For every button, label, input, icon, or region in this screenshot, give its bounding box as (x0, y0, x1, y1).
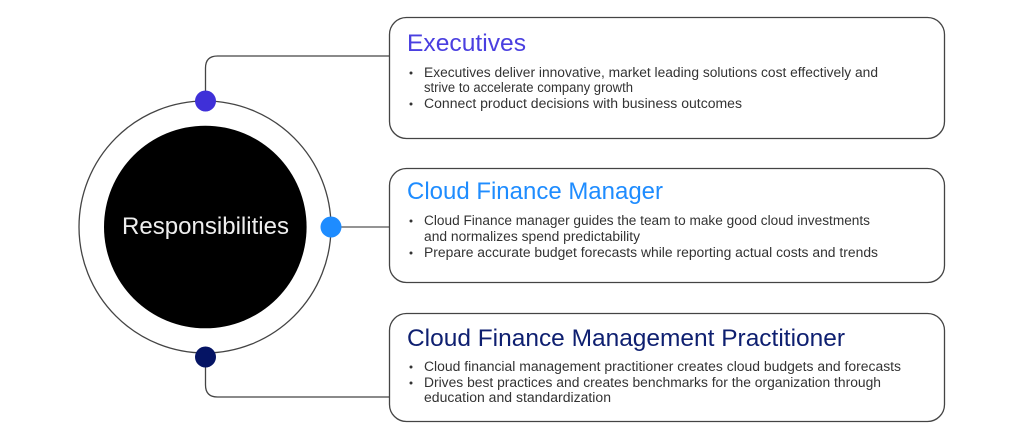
node: cloud finance manager (320, 216, 342, 238)
panel: cloud finance manager (390, 168, 944, 282)
bullet list: practitioner: Cloud financial management practitioner creates cloud budgets and forecasts (424, 359, 901, 374)
central label: Responsibilities (122, 213, 289, 240)
bullet list: practitioner: education and standardization (424, 390, 611, 405)
connector: cloud finance manager (331, 226, 389, 228)
bullet list: cloud finance manager: Prepare accurate budget forecasts while reporting actual costs and trends (424, 245, 878, 260)
bullet list: cloud finance manager: and normalizes spend predictability (424, 229, 640, 244)
bullet list: executives (410, 65, 878, 111)
bullet list: executives: Executives deliver innovative, market leading solutions cost effectively and (424, 65, 878, 80)
bullet list: practitioner: Drives best practices and creates benchmarks for the organization through (424, 375, 881, 390)
heading: practitioner: Cloud Finance Management Practitioner (407, 325, 845, 352)
connector: executives (206, 56, 389, 101)
bullet list: executives: strive to accelerate company growth (424, 80, 633, 95)
outer ring (79, 101, 331, 353)
bullet list: cloud finance manager (410, 213, 878, 260)
panel: practitioner (390, 314, 944, 422)
bullet list: practitioner (410, 359, 901, 405)
node: executives (195, 90, 216, 112)
heading: executives: Executives (407, 30, 526, 57)
bullet list: executives: Connect product decisions with business outcomes (424, 96, 742, 111)
bullet list: cloud finance manager: Cloud Finance manager guides the team to make good cloud investments (424, 213, 870, 228)
node: practitioner (195, 346, 216, 368)
connector: practitioner (206, 357, 389, 397)
panel: executives (390, 18, 944, 138)
heading: cloud finance manager: Cloud Finance Manager (407, 178, 663, 205)
central circle (104, 126, 307, 328)
